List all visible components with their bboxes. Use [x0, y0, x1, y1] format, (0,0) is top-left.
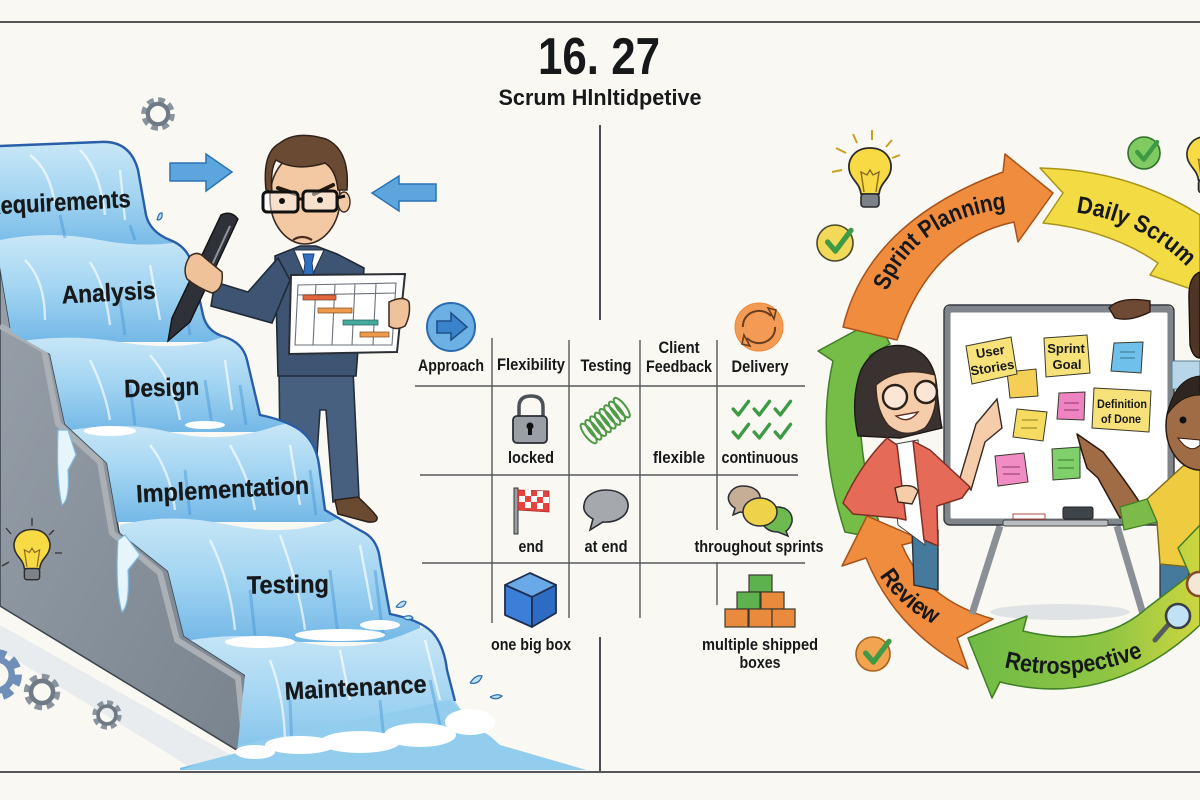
arrow: retrospective [968, 525, 1200, 698]
cycle labels [874, 196, 1194, 678]
label: implementation: Implementation [135, 472, 310, 509]
arrow: sprint planning [843, 154, 1053, 340]
waterfall labels [0, 185, 427, 706]
table grid [415, 338, 805, 623]
cell: end: end [518, 537, 544, 556]
woman face [876, 372, 936, 433]
bottom rule [0, 771, 1200, 773]
note: blue [1111, 342, 1143, 373]
man head [263, 135, 350, 244]
yellow sweater [1147, 462, 1200, 568]
cell: multiple shipped boxes: boxes [740, 653, 780, 672]
icon: gear top [145, 101, 171, 127]
woman smile [896, 412, 918, 420]
icon: checkered flag [514, 488, 549, 534]
arrow: green left [818, 319, 890, 540]
icon: bulb left [832, 130, 900, 207]
head [1166, 382, 1200, 470]
green cuff [1120, 499, 1157, 530]
woman lower hand [895, 486, 918, 504]
cell: at end: at end [584, 537, 628, 556]
cell: multiple shipped boxes: multiple shipped [702, 635, 818, 654]
note: yellow lower [1013, 409, 1047, 441]
icon: gear mid [28, 678, 56, 706]
man trousers [279, 370, 359, 502]
centre divider upper [599, 125, 601, 320]
row one labels [508, 448, 798, 467]
arrow: daily scrum [1040, 168, 1200, 292]
man left hand [185, 253, 222, 293]
person in yellow [1077, 376, 1200, 600]
pointing arm [1077, 434, 1140, 518]
note: user stories [966, 337, 1017, 384]
row three labels [491, 635, 818, 672]
icon: coloured speech bubbles [728, 486, 792, 536]
icon: bulb right [1187, 136, 1200, 193]
whiteboard legs [972, 526, 1143, 614]
comparison table [415, 303, 824, 672]
sticky notes [966, 335, 1151, 486]
note: definition of done [1092, 388, 1151, 432]
label: design: Design [124, 373, 200, 403]
note: yellow blank [1007, 369, 1038, 398]
table headers [418, 338, 789, 376]
note: green lower [1052, 447, 1080, 480]
label: maintenance: Maintenance [284, 670, 427, 706]
cell: locked: locked [508, 448, 554, 467]
water splashes [157, 213, 502, 699]
hair [1167, 376, 1200, 415]
panel: scrum cycle [816, 130, 1200, 699]
icon: delivery cycle [735, 303, 783, 351]
cell: continuous: continuous [722, 448, 798, 467]
subtitle: Scrum Hlnltidpetive [498, 85, 702, 110]
label: testing: Testing [247, 570, 329, 600]
header: flexibility: Flexibility [497, 355, 565, 374]
label: sprint planning: Sprint Planning [874, 196, 1005, 290]
icon: gear small [95, 703, 119, 727]
wall edge highlight [0, 326, 245, 748]
label: analysis: Analysis [61, 277, 156, 309]
man jacket [275, 246, 364, 376]
water outline [0, 142, 455, 701]
icon: green check badge [1128, 137, 1160, 169]
wall shadow [0, 625, 240, 767]
note: sprint goal [1044, 335, 1090, 377]
panel: waterfall man [211, 135, 410, 522]
note: sprint goal: Sprint [1047, 341, 1085, 356]
cell: multiple shipped boxes [702, 635, 818, 672]
man hand on board [1109, 300, 1150, 319]
man shoe [335, 497, 377, 522]
cell: throughout sprints: throughout sprints [694, 537, 824, 556]
note: sprint goal: Goal [1053, 357, 1081, 372]
woman hair back [855, 346, 942, 438]
man checked shirt [1172, 361, 1200, 389]
centre divider lower [599, 637, 601, 771]
header: client feedback: Client [658, 338, 700, 357]
row two labels [518, 537, 824, 556]
header: testing: Testing [580, 356, 632, 375]
top rule [0, 21, 1200, 23]
foam [84, 421, 495, 759]
header: client feedback [646, 338, 712, 376]
note: pink small [1057, 392, 1085, 420]
icon: approach arrow [427, 303, 475, 351]
woman glasses [883, 381, 937, 409]
gantt chart board [289, 274, 405, 354]
panel: waterfall wall [0, 267, 252, 767]
note: definition of done: Definition [1097, 397, 1147, 411]
man right hand [389, 298, 410, 328]
wall body [0, 267, 252, 752]
header: client feedback: Feedback [646, 357, 712, 376]
water bands [0, 140, 600, 778]
arrow: review [842, 516, 993, 669]
icon: yellow check badge [817, 225, 853, 261]
panel: waterfall [0, 140, 600, 778]
icon: stacked boxes [725, 575, 795, 627]
icon: bulb on wall [2, 518, 62, 580]
cell: flexible: flexible [653, 448, 705, 467]
icon: magnifier [1155, 604, 1190, 640]
whiteboard [944, 305, 1174, 526]
icon: gear large left [0, 655, 16, 695]
eye and smile [1178, 416, 1200, 449]
icon: clock partial [1187, 572, 1200, 596]
woman jacket [843, 438, 970, 546]
icon: grey speech bubble [584, 490, 628, 530]
note: pink lower [995, 453, 1028, 486]
woman trousers [912, 530, 938, 590]
icon: orange check badge [856, 637, 890, 671]
header: approach: Approach [418, 356, 484, 375]
floor shadow [990, 604, 1130, 620]
cell: one big box: one big box [491, 635, 571, 654]
title number: 16. 27 [538, 28, 660, 86]
label: retrospective: Retrospective [1005, 646, 1142, 678]
note: definition of done: of Done [1101, 412, 1141, 426]
woman forearm and hand [960, 399, 1002, 490]
icon: spring [578, 396, 632, 445]
pen [168, 213, 238, 341]
icon: lock [513, 396, 547, 443]
ice drips [58, 430, 140, 612]
icon: big blue box [505, 573, 556, 627]
title [498, 28, 702, 110]
woman [843, 346, 1002, 590]
header: delivery: Delivery [732, 357, 789, 376]
man behind board [1109, 272, 1200, 389]
jeans [1160, 562, 1190, 600]
arrow: left pointing [372, 176, 436, 211]
icon: six check marks [733, 401, 790, 438]
note: user stories: Stories [969, 357, 1015, 378]
man head partial [1189, 272, 1200, 358]
woman top [890, 440, 925, 545]
label: review: Review [880, 567, 940, 623]
arrow: right pointing [170, 154, 232, 191]
man shirt and tie [294, 250, 324, 290]
pen and hand [168, 213, 238, 341]
note: user stories: User [975, 342, 1006, 361]
man arm [211, 258, 290, 323]
label: daily scrum: Daily Scrum [1078, 196, 1194, 266]
